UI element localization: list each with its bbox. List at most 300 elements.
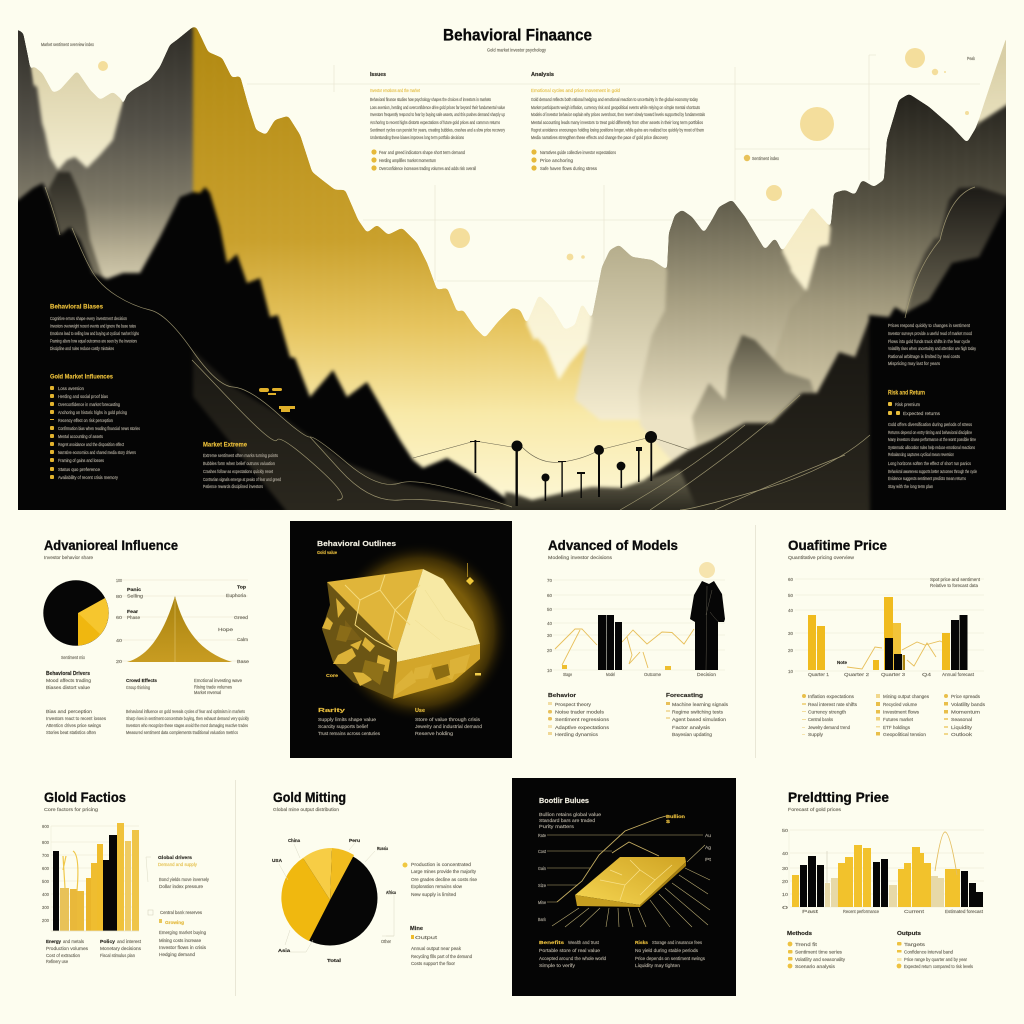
area chart: Fear xyxy=(127,609,138,614)
area chart xyxy=(116,578,249,664)
list: inputs: Scenario analysis xyxy=(795,964,836,969)
three-column list: Volatility bands xyxy=(951,702,986,707)
list: outputs: Expected return compared to risk levels xyxy=(904,964,974,969)
area chart: Hope xyxy=(218,627,234,632)
list: key factors: Overconfidence in market forecasting xyxy=(58,402,120,407)
text column: analysis: Models of investor behavior explain why prices overshoot, then revert slowly toward levels supported by fundamentals xyxy=(531,112,706,117)
list: key factors: Narrative economics and shared media story drivers xyxy=(58,450,137,455)
text block: right dark panel: Rational arbitrage is limited by real costs xyxy=(888,354,961,359)
list: inputs xyxy=(787,931,846,969)
captions below chart: Production volumes xyxy=(46,946,89,951)
text column: issues: Investor emotions and the market xyxy=(370,88,421,93)
chart: bars and lines: 60 xyxy=(788,577,793,582)
text block: right dark panel: Volatility rises when uncertainty and attention are high today xyxy=(888,346,976,351)
area chart: Euphoria xyxy=(226,593,246,598)
guide lines xyxy=(247,55,980,281)
bullet list xyxy=(531,149,617,171)
list: outputs: Price range by quarter and by year xyxy=(904,957,967,962)
subheading: Quantitative pricing overview xyxy=(788,555,855,560)
side notes: Central bank reserves xyxy=(160,910,203,915)
three-column list: Investment flows xyxy=(883,710,920,714)
card text: Supply limits shape value xyxy=(318,717,376,722)
card bottom text: Wealth and trust xyxy=(568,940,600,945)
bar chart: 900 xyxy=(42,824,49,829)
side notes: Global drivers xyxy=(158,855,192,860)
chart: bars and lines: Outcome xyxy=(644,672,661,677)
text blocks below: Stories beat statistics often xyxy=(46,730,96,735)
gold bar with rays: Pt xyxy=(705,857,712,862)
model lists: Adaptive expectations xyxy=(555,725,610,730)
list: key factors: Availability of recent crisis memory xyxy=(58,475,119,480)
text blocks below: Biases distort value xyxy=(46,685,90,690)
subheading: Modeling investor decisions xyxy=(548,555,613,560)
text blocks below: Mood affects trading xyxy=(46,678,91,683)
top-right caption: Peak xyxy=(967,56,976,61)
card bottom text: Accepted around the whole world xyxy=(539,956,606,961)
gold bar with rays: Bullion xyxy=(666,814,685,819)
heading: Advanced of Models xyxy=(548,537,678,553)
card text: Store of value through crisis xyxy=(415,717,481,722)
list: inputs: Methods xyxy=(787,931,812,937)
captions below chart: and metals xyxy=(63,939,85,944)
area chart: Panic xyxy=(127,587,141,592)
card bottom text: No yield during stable periods xyxy=(635,948,699,953)
bar chart: 300 xyxy=(42,905,49,910)
card bottom text: Portable store of real value xyxy=(539,948,600,953)
text block: left dark panel: Behavioral Biases xyxy=(50,304,103,310)
black foreground silhouette right xyxy=(644,320,872,510)
three-column list: Seasonal xyxy=(951,717,972,722)
text column: analysis: Media narratives strengthen these effects and change the pace of gold price discovery xyxy=(531,135,669,140)
text blocks below: Measured sentiment data complements traditional valuation metrics xyxy=(126,730,239,735)
bar chart: 50 xyxy=(782,828,789,833)
text column: analysis: Mental accounting leads many investors to treat gold differently from other assets in their long term portfolios xyxy=(531,120,704,125)
three-column list: Supply xyxy=(808,732,824,737)
bullet list xyxy=(371,149,476,171)
icon: yellow mining machine xyxy=(259,388,295,412)
chart: bars and lines: 10 xyxy=(788,669,793,674)
pie labels and leaders xyxy=(272,838,396,963)
model lists: Factor analysis xyxy=(672,725,711,730)
bar chart: 40 xyxy=(782,851,789,856)
gold bar with rays: Rate xyxy=(538,833,546,838)
captions below chart xyxy=(46,939,142,964)
side notes xyxy=(146,855,210,957)
black foreground silhouette left xyxy=(10,183,512,515)
list: key factors: Mental accounting of assets xyxy=(58,434,104,439)
card text xyxy=(318,708,482,736)
bullet list: Narratives guide collective investor expectations xyxy=(540,150,617,155)
three-column list: Outlook xyxy=(951,732,973,737)
model lists: Prospect theory xyxy=(555,702,592,707)
gold bar with rays: Au xyxy=(705,833,711,838)
list: outputs: Targets xyxy=(904,942,926,947)
model lists: Regime switching tests xyxy=(672,710,724,714)
text blocks below: Behavioral influence on gold reveals cycles of fear and optimism in markets xyxy=(126,709,246,714)
heading: Glold Factios xyxy=(44,789,126,805)
area chart: Selling xyxy=(127,594,144,598)
panel: advanced models xyxy=(547,537,729,737)
model lists: Forecasting xyxy=(666,693,703,699)
bar chart xyxy=(42,823,139,931)
subheading: Forecast of gold prices xyxy=(788,807,842,812)
text column: analysis: Market participants weigh inflation, currency risk and geopolitical events while relying on simple mental shortcuts xyxy=(531,105,701,110)
panel: price chart xyxy=(788,537,986,737)
chart: bars and lines: 40 xyxy=(788,608,793,613)
text block: left dark panel: Cognitive errors shape every investment decision xyxy=(50,316,127,321)
gold bar with rays: $ xyxy=(666,819,671,824)
captions below chart: and interest xyxy=(117,939,142,944)
side notes: Growing xyxy=(165,920,184,925)
three-column list: Liquidity xyxy=(951,725,973,730)
list: key factors: Loss aversion xyxy=(58,386,84,391)
card bottom text: Benefits xyxy=(539,940,565,945)
mining notes: Recycling fills part of the demand xyxy=(411,954,472,959)
three-column list: Central banks xyxy=(808,717,834,722)
text block: right dark panel: Systematic allocation rules help reduce emotional reactions xyxy=(888,445,976,450)
list: outputs xyxy=(897,931,974,969)
pie labels and leaders: Russia xyxy=(377,846,388,851)
contour lines xyxy=(45,187,975,510)
side notes: Hedging demand xyxy=(159,952,195,957)
text block: right dark panel: Risk premium xyxy=(895,402,920,407)
text block: right dark panel: Behavioral awareness supports better outcomes through the cycle xyxy=(888,469,977,474)
text block: left dark panel: Investors overweight recent events and ignore the base rates xyxy=(50,324,136,328)
panel: influence xyxy=(43,537,250,735)
area chart: Top xyxy=(237,584,246,590)
side notes: Mining costs increase xyxy=(159,938,201,943)
chart: bars and lines: 60 xyxy=(547,593,552,598)
panel: gold mining xyxy=(272,789,477,966)
bullet list: Overconfidence increases trading volumes and adds risk overall xyxy=(379,166,476,171)
text blocks below: Market reversal xyxy=(194,690,221,695)
chart: bars and lines: 20 xyxy=(547,648,552,653)
text column: analysis: Analysis xyxy=(531,72,554,78)
text block: right dark panel: Returns depend on entry timing and behavioral discipline xyxy=(888,430,972,435)
text column: issues: Behavioral finance studies how psychology shapes the choices of investors in markets xyxy=(370,97,491,102)
three-column list: Jewelry demand trend xyxy=(808,725,850,730)
text block: left dark panel: Framing alters how equal outcomes are seen by the investors xyxy=(50,338,137,344)
text blocks below: Attention drives price swings xyxy=(46,723,102,728)
mining notes: New supply is limited xyxy=(411,892,456,897)
bar chart: 10 xyxy=(782,892,789,897)
bar chart: Estimated forecast xyxy=(945,909,984,914)
gold bar with rays: Bank xyxy=(538,917,547,922)
pie labels and leaders: Peru xyxy=(349,838,360,843)
mountains xyxy=(10,27,1012,515)
captions below chart: Refinery use xyxy=(46,959,68,964)
card text: Jewelry and industrial demand xyxy=(415,724,482,729)
bullet list: Safe haven flows during stress xyxy=(540,166,598,171)
text block: right dark panel: Flows into gold funds track shifts in the fear cycle xyxy=(888,339,970,344)
three-column list: Inflation expectations xyxy=(808,694,855,699)
model lists xyxy=(548,693,729,737)
chart: bars and lines xyxy=(547,578,725,677)
bar chart: 400 xyxy=(42,892,49,897)
text column: analysis: Emotional cycles and price movement in gold xyxy=(531,88,620,93)
mining notes: Ore grades decline as costs rise xyxy=(411,877,477,882)
text column: issues: Sentiment cycles can persist for years, creating bubbles, crashes and a slow price recovery xyxy=(370,128,506,132)
text blocks below: Sharp rises in sentiment concentrate buying, then exhaust demand very quickly xyxy=(126,716,250,721)
mining notes: Large mines provide the majority xyxy=(411,869,477,874)
mining notes: Mine xyxy=(410,926,423,932)
mining notes: Production is concentrated xyxy=(411,862,471,867)
list: key factors: Herding and social proof bias xyxy=(58,394,109,399)
chart: bars and lines: Quarter 1 xyxy=(808,672,829,677)
text blocks below xyxy=(46,671,250,735)
area chart: 20 xyxy=(116,659,123,664)
text block: right dark panel: Mispricing may last for years xyxy=(888,361,941,366)
list: inputs: Trend fit xyxy=(795,942,818,947)
three-column list: Momentum xyxy=(951,710,980,714)
panel: gold nugget dark card xyxy=(290,521,512,758)
area chart: 80 xyxy=(116,594,123,599)
bullet list: Fear and greed indicators shape short term demand xyxy=(379,150,465,155)
top-left caption: Market sentiment overview index xyxy=(41,42,95,47)
captions below chart: Energy xyxy=(46,939,61,944)
text block: bottom centre dark: Market Extreme xyxy=(203,442,247,448)
text column: issues: Investors frequently respond to fear by buying safe assets, and this pushes demand sharply up xyxy=(370,112,505,117)
text block: right dark panel xyxy=(888,323,977,489)
small legend bullet: Sentiment index xyxy=(752,156,780,161)
panel divider xyxy=(235,780,236,996)
bar chart: 500 xyxy=(42,879,49,884)
card subheading: Gold value xyxy=(317,550,337,555)
model lists: Behavior xyxy=(548,693,576,699)
text blocks below: Emotional investing wave xyxy=(194,678,242,683)
list: key factors: Framing of gains and losses xyxy=(58,458,105,463)
text blocks below: Rising trade volumes xyxy=(194,684,233,690)
bar chart: 800 xyxy=(42,840,49,845)
bullet list: Herding amplifies market momentum xyxy=(379,158,436,163)
card bottom text: Simple to verify xyxy=(539,963,576,968)
main title xyxy=(443,26,592,52)
text column: issues: Understanding these biases improves long term portfolio decisions xyxy=(370,135,464,140)
text block: right dark panel: Rebalancing captures cyclical mean reversion xyxy=(888,452,954,457)
card heading: Behavioral Outlines xyxy=(317,539,396,548)
list: outputs: Confidence interval band xyxy=(904,950,953,954)
chart: bars and lines: 40 xyxy=(547,621,552,626)
mining notes: Output xyxy=(415,935,438,940)
area chart: 100 xyxy=(116,578,122,583)
text block: right dark panel: Long horizons soften the effect of short run panics xyxy=(888,461,972,466)
text blocks below: Investors who recognize these stages avoid the most damaging reactive trades xyxy=(126,723,249,728)
text column: analysis: Gold demand reflects both rational hedging and emotional reaction to uncertainty in the global economy today xyxy=(531,97,699,102)
chart: bars and lines: 50 xyxy=(788,593,793,598)
nugget label: Core xyxy=(326,673,339,678)
gold bar with rays: Ag xyxy=(705,845,711,850)
bar chart: 20 xyxy=(782,879,789,884)
model lists: Sentiment regressions xyxy=(555,717,610,722)
list: inputs: Sentiment time series xyxy=(795,950,843,954)
card bottom text: Storage and insurance fees xyxy=(652,940,703,945)
list: key factors: Gold Market Influences xyxy=(50,374,113,380)
gold bar with rays: Size xyxy=(538,883,546,888)
list: key factors: Regret avoidance and the disposition effect xyxy=(58,442,125,447)
list: key factors xyxy=(50,374,141,480)
list: key factors: Confirmation bias when reading financial news stories xyxy=(58,426,141,431)
card intro text xyxy=(539,812,601,829)
chart: bars and lines: 70 xyxy=(547,578,552,583)
chart: bars and lines: Annual forecast xyxy=(942,672,975,677)
bar chart: 0 xyxy=(782,905,789,910)
pie labels and leaders: Africa xyxy=(386,890,396,895)
heading: Gold Mitting xyxy=(273,789,346,805)
area chart: 60 xyxy=(116,615,123,620)
text column: issues: Loss aversion, herding and overconfidence drive gold prices far beyond their fundamental value xyxy=(370,105,505,110)
pie chart: Sentiment mix xyxy=(61,655,86,660)
mining notes: Exploration remains slow xyxy=(411,884,463,889)
chart: bars and lines: 50 xyxy=(547,607,552,612)
text block: right dark panel: Investor surveys provide a useful read of market mood xyxy=(888,331,972,336)
text blocks below: Group thinking xyxy=(126,685,150,690)
bullet list: Price anchoring xyxy=(540,158,573,163)
model lists: Machine learning signals xyxy=(672,702,729,707)
heading: Advanioreal Influence xyxy=(44,537,178,553)
power poles and wires xyxy=(413,431,690,506)
captions below chart: Policy xyxy=(100,939,115,944)
chart: bars and lines: 20 xyxy=(788,648,793,653)
bar chart: 700 xyxy=(42,853,49,858)
mining notes xyxy=(402,862,477,966)
heading: Preldtting Priee xyxy=(788,789,889,805)
chart: bars and lines: Decision xyxy=(697,672,716,677)
panel divider xyxy=(755,525,756,758)
text block: bottom centre dark: Contrarian signals emerge at peaks of fear and greed xyxy=(203,477,281,482)
model lists: Herding dynamics xyxy=(555,732,599,737)
text block: bottom centre dark: Bubbles form when belief outruns valuation xyxy=(203,461,275,466)
card intro text: Standard bars are traded xyxy=(539,818,595,823)
text column: analysis: Regret avoidance encourages holding losing positions longer, while gains are realized too quickly by most of them xyxy=(531,128,704,132)
text block: left dark panel: Discipline and rules reduce costly mistakes xyxy=(50,346,115,351)
text column: issues: Anchoring to recent highs distorts expectations of future gold prices and common returns xyxy=(370,120,501,125)
three-column list: Price spreads xyxy=(951,694,981,699)
text block: bottom centre dark xyxy=(203,442,281,489)
card text: Reserve holding xyxy=(415,731,454,736)
text block: bottom centre dark: Patience rewards disciplined investors xyxy=(203,484,264,489)
text block: right dark panel: Many investors chase performance at the worst possible time xyxy=(888,437,976,442)
captions below chart: Cost of extraction xyxy=(46,953,80,958)
side notes: Emerging market buying xyxy=(159,930,206,935)
three-column list: Recycled volume xyxy=(883,702,917,707)
card intro text: Purity matters xyxy=(539,824,575,829)
text block: right dark panel: Gold offers diversification during periods of stress xyxy=(888,422,973,427)
side notes: Demand and supply xyxy=(158,862,198,867)
gold bar with rays: Mine xyxy=(538,900,546,905)
text block: bottom centre dark: Extreme sentiment often marks turning points xyxy=(203,453,279,458)
three-column list: Currency strength xyxy=(808,710,846,714)
chart: bars and lines: 10 xyxy=(547,668,552,673)
icon: gold nugget xyxy=(322,542,510,722)
text block: left dark panel xyxy=(50,304,139,351)
list: key factors: Anchoring on historic highs in gold pricing xyxy=(58,410,127,415)
pie labels and leaders: Total xyxy=(327,958,341,963)
panel: gold bar dark card xyxy=(512,778,736,996)
card intro text: Bullion retains global value xyxy=(539,812,601,817)
mining notes: Costs support the floor xyxy=(411,961,455,966)
area chart: 40 xyxy=(116,638,123,643)
list: outputs: Outputs xyxy=(897,931,921,937)
text column: issues: Issues xyxy=(370,72,386,78)
panel: gold factors xyxy=(42,789,210,964)
list: key factors: Status quo preference xyxy=(58,467,100,472)
text blocks below: Crowd Effects xyxy=(126,678,157,683)
three-column list xyxy=(802,694,986,737)
text block: right dark panel: Expected returns xyxy=(903,411,941,416)
text block: right dark panel: Evidence suggests sentiment predicts mean returns xyxy=(888,476,967,481)
bar chart: 600 xyxy=(42,866,49,871)
side notes: Dollar index pressure xyxy=(159,884,203,889)
bar chart: Current xyxy=(904,909,925,914)
pale sun circles xyxy=(98,48,969,260)
area chart: Phase xyxy=(127,615,140,620)
card heading: Bootlir Bulues xyxy=(539,798,589,805)
icon: investor figure xyxy=(690,562,725,670)
panel: predicting price xyxy=(782,789,984,969)
gold bar with rays: Gain xyxy=(538,866,546,871)
model lists: Noise trader models xyxy=(555,710,605,714)
pie labels and leaders: China xyxy=(288,838,300,843)
chart: bars and lines: Q4 xyxy=(922,672,932,677)
text block: right dark panel: Stay with the long term plan xyxy=(888,484,933,489)
bar chart: Recent performance xyxy=(843,909,879,914)
area chart: Greed xyxy=(234,615,248,620)
side notes: Bond yields move inversely xyxy=(159,877,210,882)
text blocks below: Behavioral Drivers xyxy=(46,671,90,677)
text block: right dark panel: Risk and Return xyxy=(888,390,925,396)
text column: issues xyxy=(370,72,506,171)
three-column list: Mining output changes xyxy=(883,694,930,699)
text column: analysis xyxy=(531,72,706,171)
pie chart xyxy=(43,580,109,660)
three-column list: Geopolitical tension xyxy=(883,732,926,737)
card bottom text: Liquidity may tighten xyxy=(635,963,680,968)
pie labels and leaders: Asia xyxy=(278,948,291,953)
chart: bars and lines: 30 xyxy=(788,631,793,636)
main title: Gold market investor psychology xyxy=(487,48,547,52)
card bottom text xyxy=(539,940,706,968)
captions below chart: Fiscal stimulus plan xyxy=(100,953,135,958)
model lists: Agent based simulation xyxy=(672,717,726,722)
text blocks below: Bias and perception xyxy=(46,709,93,714)
mining notes: Annual output near peak xyxy=(411,946,462,951)
gold bar with rays: Cost xyxy=(538,849,547,854)
chart: bars and lines: 30 xyxy=(547,633,552,638)
text blocks below: Investors react to recent losses xyxy=(46,716,107,721)
pie labels and leaders: Other xyxy=(381,939,391,944)
chart: bars and lines: Relative to forecast data xyxy=(930,583,978,588)
bar chart xyxy=(782,828,984,914)
three-column list: Futures market xyxy=(883,717,914,722)
chart: bars and lines: Spot price and sentiment xyxy=(930,577,981,582)
pie chart xyxy=(281,848,378,946)
card text: Rarity xyxy=(318,708,345,714)
panel: hero mountain landscape xyxy=(10,26,1012,515)
three-column list: Real interest rate shifts xyxy=(808,702,858,707)
card text: Scarcity supports belief xyxy=(318,724,369,729)
subheading: Core factors for pricing xyxy=(44,807,99,812)
heading: Ouafitime Price xyxy=(788,537,887,553)
gold bar with rays xyxy=(538,814,712,927)
small legend bullet xyxy=(744,155,780,161)
list: key factors: Recency effect on risk perception xyxy=(58,418,113,423)
text block: left dark panel: Emotions lead to selling low and buying at cyclical market highs xyxy=(50,331,139,336)
chart: bars and lines: Quarter 2 xyxy=(844,672,870,677)
card text: Use xyxy=(415,708,425,714)
model lists: Bayesian updating xyxy=(672,732,712,737)
chart: bars and lines xyxy=(788,577,984,677)
three-column list: ETF holdings xyxy=(883,725,911,730)
